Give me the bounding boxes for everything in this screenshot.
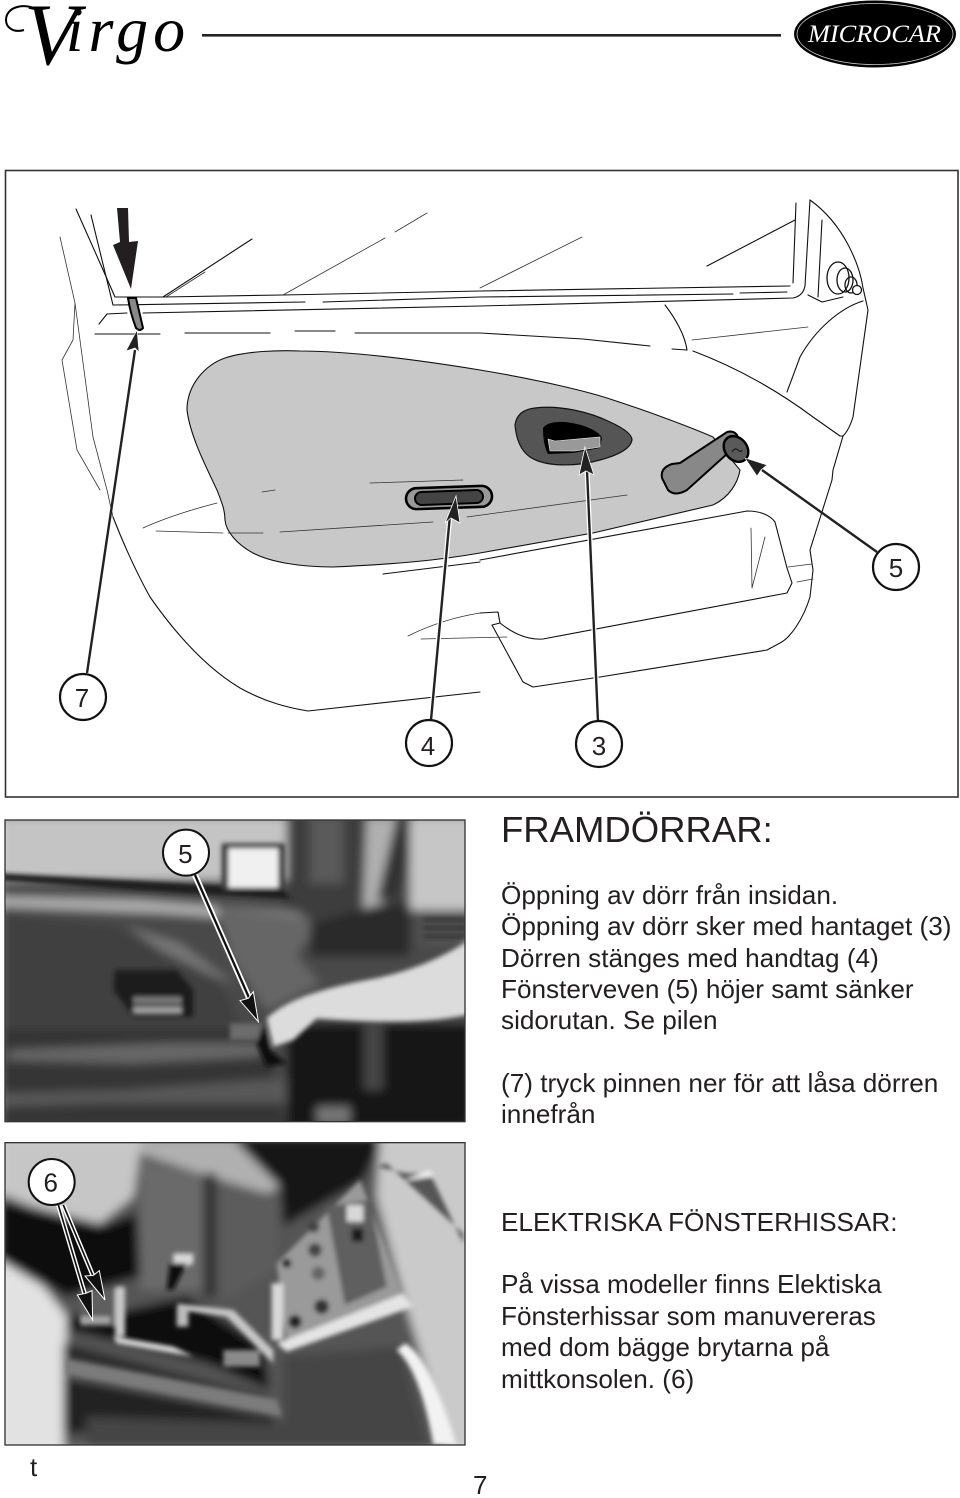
callout 5 on photo: 5 <box>178 839 193 869</box>
text block: lock pin <box>501 1068 938 1129</box>
lock pin 7 <box>128 298 143 330</box>
window antenna/mirror knob <box>827 262 862 294</box>
panel: door line drawing <box>6 170 958 797</box>
logo: Microcar oval <box>794 0 956 68</box>
footer marker: t <box>30 1452 38 1482</box>
door handle 4 <box>406 486 492 509</box>
callout 6 on photo: 6 <box>43 1168 58 1198</box>
callout 7: 7 <box>75 683 89 713</box>
callout 7 <box>60 674 106 720</box>
arrow to 3 <box>579 447 598 722</box>
text block: lock pin: (7) tryck pinnen ner för att låsa dörren <box>501 1068 938 1098</box>
arrow to 5 <box>745 458 877 552</box>
text block: electric windows <box>501 1269 882 1394</box>
text block: door instructions: sidorutan. Se pilen <box>501 1005 718 1035</box>
text block: electric windows: med dom bägge brytarna på <box>501 1332 830 1362</box>
callout 5 on photo <box>163 830 209 876</box>
text block: electric windows: mittkonsolen. (6) <box>501 1364 694 1394</box>
text block: door instructions: Dörren stänges med handtag (4) <box>501 943 879 973</box>
header rule <box>202 34 781 37</box>
door panel grey insert <box>187 351 740 567</box>
arrow to 5 on photo <box>195 875 258 1022</box>
heading: electric windows: ELEKTRISKA FÖNSTERHISSAR: <box>501 1207 898 1237</box>
icon: big black arrow <box>113 208 138 289</box>
callout 5: 5 <box>889 553 903 583</box>
text block: electric windows: På vissa modeller finns Elektiska <box>501 1269 882 1299</box>
logo: Microcar oval: MICROCAR <box>807 21 941 48</box>
photo: window crank in door <box>0 810 473 1130</box>
callout 6 on photo <box>29 1159 75 1205</box>
callout 3: 3 <box>592 731 606 761</box>
text block: door instructions: Öppning av dörr sker med hantaget (3) <box>501 911 951 941</box>
arrow to 4 <box>431 496 460 720</box>
photo: centre console switches <box>0 1137 473 1450</box>
door outline lines <box>60 200 868 711</box>
arrow to 7 <box>87 330 139 673</box>
heading: Framdörrar: FRAMDÖRRAR: <box>501 809 773 850</box>
callout 3 <box>576 721 622 767</box>
text block: door instructions: Öppning av dörr från insidan. <box>501 880 838 910</box>
text block: lock pin: innefrån <box>501 1099 595 1129</box>
text block: door instructions: Fönsterveven (5) höjer samt sänker <box>501 974 914 1004</box>
callout 4: 4 <box>421 731 435 761</box>
callout 5 <box>873 544 919 590</box>
window crank 5 <box>662 431 753 494</box>
text block: electric windows: Fönsterhissar som manuvereras <box>501 1301 876 1331</box>
callout 4 <box>406 720 452 766</box>
arrows to switches 6 <box>58 1205 105 1320</box>
header: Virgo wordmark <box>6 0 190 84</box>
door handle 3 <box>515 407 632 465</box>
text block: door instructions <box>501 880 951 1035</box>
